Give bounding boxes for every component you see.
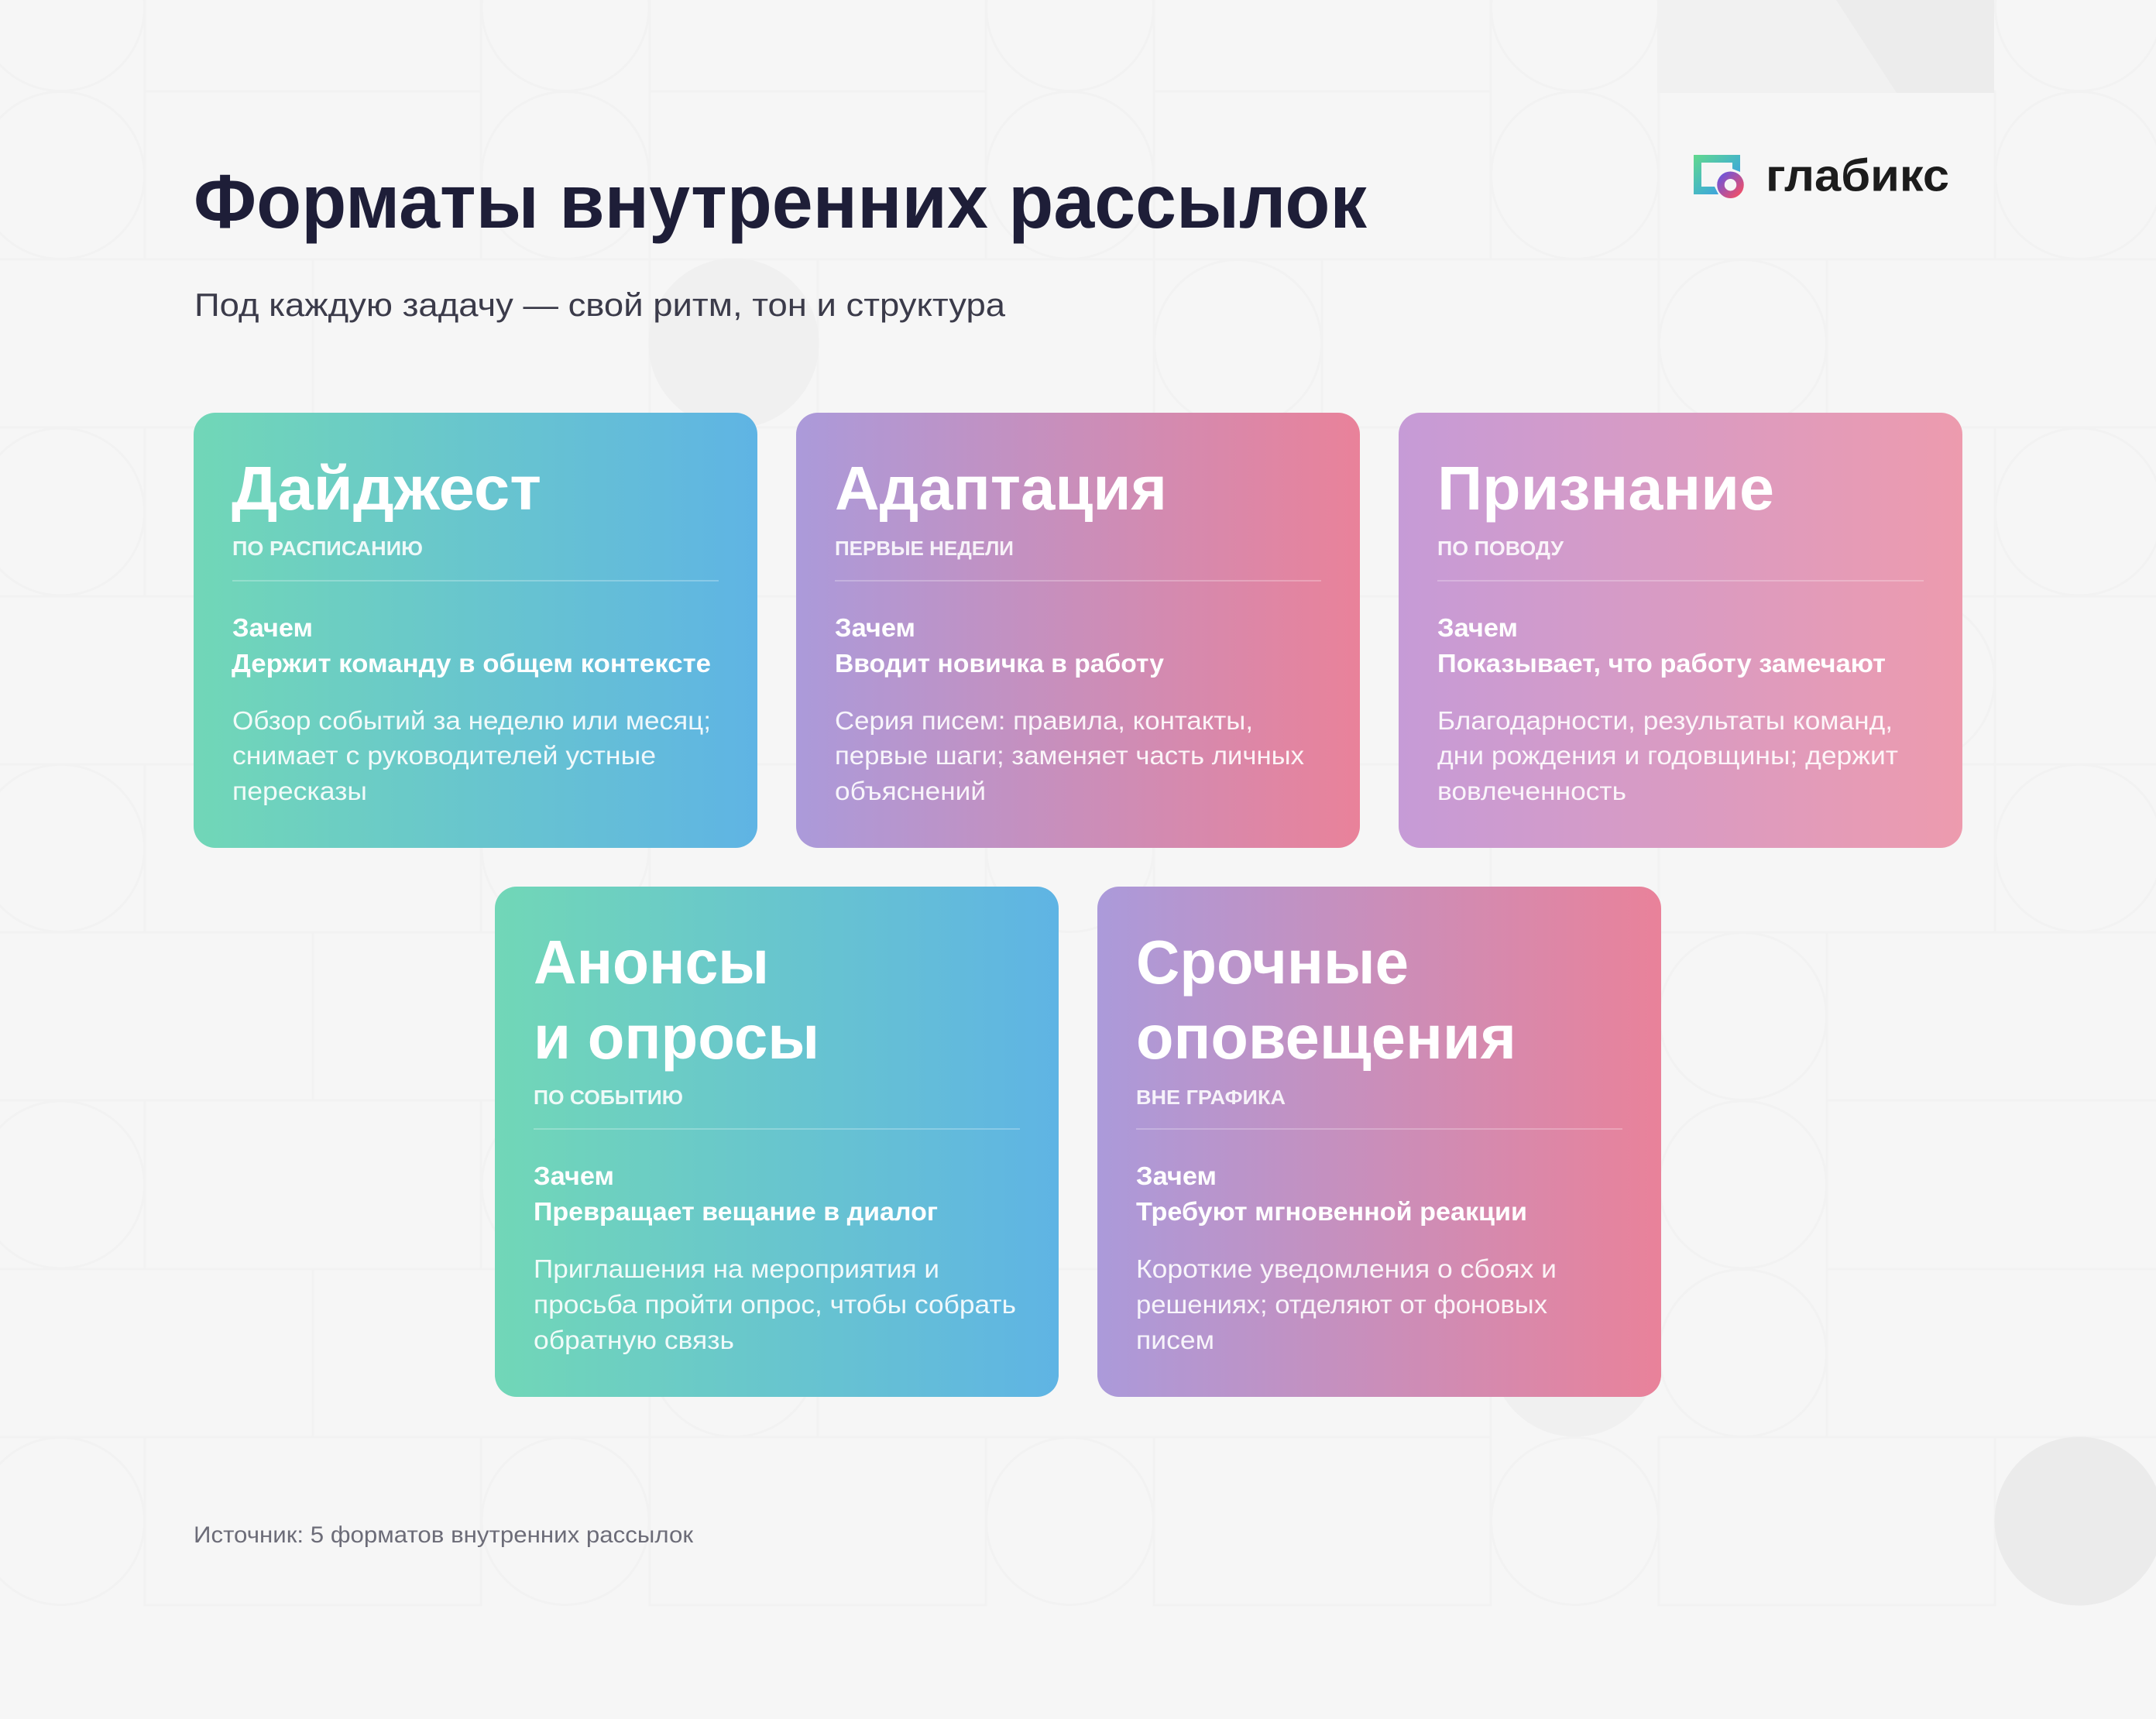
description — [534, 1254, 1016, 1354]
card background — [796, 413, 1360, 848]
description: дни рождения и годовщины; держит — [1437, 741, 1898, 770]
divider — [835, 580, 1321, 582]
why block — [835, 613, 1165, 678]
description: Приглашения на мероприятия и — [534, 1254, 939, 1283]
why block: Зачем — [232, 613, 313, 642]
source note: Источник: 5 форматов внутренних рассылок — [194, 1522, 694, 1548]
description: просьба пройти опрос, чтобы собрать — [534, 1290, 1016, 1319]
description: Серия писем: правила, контакты, — [835, 706, 1253, 735]
panel: recognition — [1399, 413, 1962, 848]
why block — [1437, 613, 1886, 678]
description: писем — [1136, 1326, 1214, 1354]
card heading: Адаптация — [835, 454, 1167, 523]
description: решениях; отделяют от фоновых — [1136, 1290, 1548, 1319]
why block: Зачем — [534, 1161, 614, 1190]
why block: Зачем — [1437, 613, 1518, 642]
card background — [1097, 887, 1661, 1397]
card heading: оповещения — [1136, 1003, 1516, 1072]
why block: Держит команду в общем контексте — [232, 649, 711, 678]
card heading — [534, 928, 819, 1072]
card schedule label: ПО СОБЫТИЮ — [534, 1086, 683, 1109]
panel: onboarding — [796, 413, 1360, 848]
divider — [534, 1128, 1020, 1130]
card background — [495, 887, 1059, 1397]
description: обратную связь — [534, 1326, 734, 1354]
panel: digest — [194, 413, 757, 848]
description — [835, 706, 1305, 805]
decorative filled shapes — [649, 0, 2156, 1606]
card schedule label: ВНЕ ГРАФИКА — [1136, 1086, 1286, 1109]
description — [232, 706, 711, 805]
why block: Требуют мгновенной реакции — [1136, 1197, 1527, 1226]
why block — [534, 1161, 938, 1226]
card background — [194, 413, 757, 848]
why block: Показывает, что работу замечают — [1437, 649, 1886, 678]
card schedule label: ПО ПОВОДУ — [1437, 537, 1564, 560]
description: Короткие уведомления о сбоях и — [1136, 1254, 1557, 1283]
why block: Зачем — [835, 613, 915, 642]
description: пересказы — [232, 777, 367, 805]
description: объяснений — [835, 777, 986, 805]
description: снимает с руководителей устные — [232, 741, 656, 770]
description: Обзор событий за неделю или месяц; — [232, 706, 711, 735]
card schedule label: ПО РАСПИСАНИЮ — [232, 537, 423, 560]
description: Благодарности, результаты команд, — [1437, 706, 1893, 735]
icon: logo frame — [1694, 155, 1740, 194]
description — [1437, 706, 1898, 805]
card heading: и опросы — [534, 1003, 819, 1072]
card heading: Признание — [1437, 454, 1774, 523]
divider — [232, 580, 719, 582]
divider — [1437, 580, 1924, 582]
icon: logo ring — [1721, 175, 1740, 194]
why block: Зачем — [1136, 1161, 1217, 1190]
subtitle: Под каждую задачу — свой ритм, тон и структура — [194, 286, 1006, 323]
why block: Вводит новичка в работу — [835, 649, 1165, 678]
why block — [1136, 1161, 1527, 1226]
panel: announcements and polls — [495, 887, 1059, 1397]
card heading: Анонсы — [534, 928, 769, 997]
why block: Превращает вещание в диалог — [534, 1197, 938, 1226]
description — [1136, 1254, 1557, 1354]
description: вовлеченность — [1437, 777, 1626, 805]
description: первые шаги; заменяет часть личных — [835, 741, 1305, 770]
card schedule label: ПЕРВЫЕ НЕДЕЛИ — [835, 537, 1014, 560]
logo: glabix — [1694, 150, 1949, 201]
logo wordmark: глабикс — [1766, 150, 1949, 201]
card background — [1399, 413, 1962, 848]
card heading: Дайджест — [232, 454, 541, 523]
card heading — [1136, 928, 1516, 1072]
card heading: Срочные — [1136, 928, 1409, 997]
title: Форматы внутренних рассылок — [194, 159, 1368, 244]
why block — [232, 613, 711, 678]
divider — [1136, 1128, 1622, 1130]
panel: urgent alerts — [1097, 887, 1661, 1397]
